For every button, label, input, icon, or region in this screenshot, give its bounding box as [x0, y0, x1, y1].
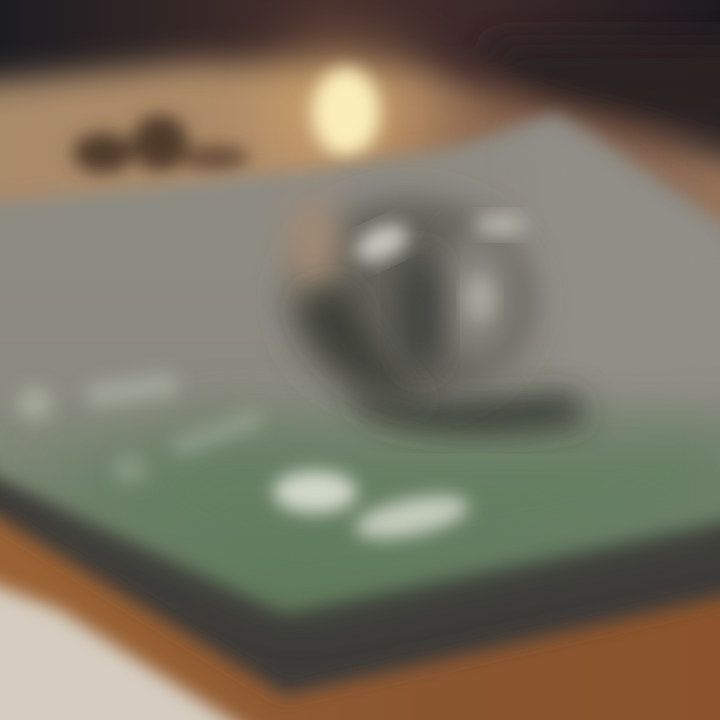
background wall — [0, 0, 720, 200]
sphere dark crescent — [300, 285, 430, 408]
sphere highlights — [350, 217, 414, 269]
sphere centre shading — [398, 252, 442, 372]
table surface — [0, 40, 720, 300]
wooden table foreground — [0, 400, 720, 720]
green lower page tint — [40, 420, 720, 600]
lamp glow — [260, 45, 430, 175]
right page shading — [520, 128, 720, 400]
sphere — [284, 195, 532, 408]
book cover edge — [0, 440, 720, 695]
sphere warm left edge — [284, 195, 340, 295]
distant dark object — [73, 115, 249, 173]
white cloth lower left — [0, 575, 270, 720]
sphere right shading — [438, 230, 518, 360]
pale text smudges — [17, 371, 472, 547]
book pages — [0, 115, 720, 612]
sphere body — [288, 198, 532, 402]
sphere shadow — [345, 375, 590, 431]
